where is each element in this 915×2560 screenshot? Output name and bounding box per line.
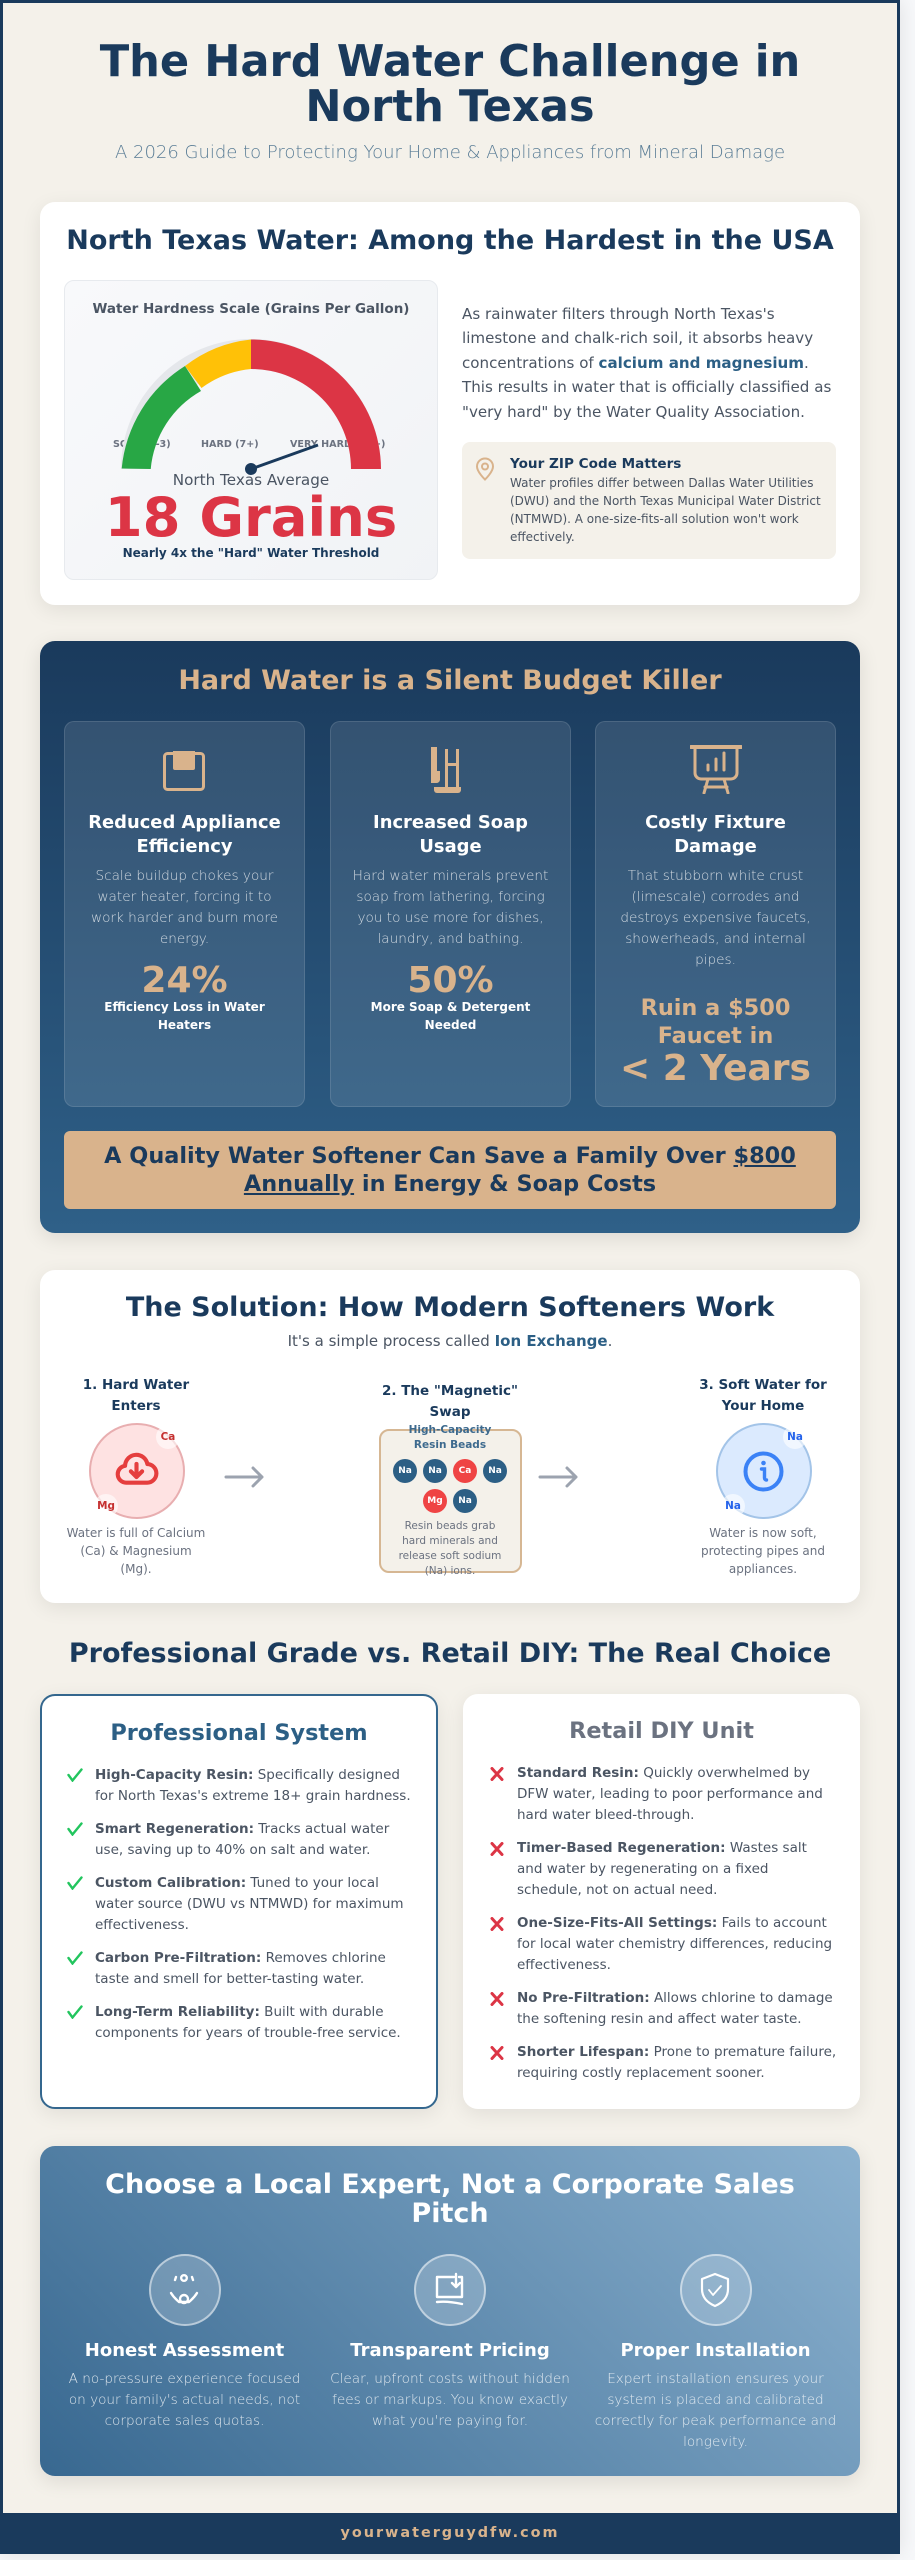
text block: explanation: As rainwater filters through North Texas's <box>462 305 775 323</box>
banner: savings: A Quality Water Softener Can Save a Family Over $800 <box>104 1143 796 1169</box>
card: soap usage: soap from lathering, forcing <box>356 889 545 905</box>
card: appliance efficiency: Efficiency <box>136 836 233 857</box>
gauge note: Nearly 4x the "Hard" Water Threshold <box>123 546 379 560</box>
badge: Mg: Mg <box>97 1500 115 1512</box>
card: soap usage: Hard water minerals prevent <box>353 868 548 884</box>
list: professional benefits: High-Capacity Resin: Specifically designed <box>95 1767 400 1783</box>
step 1 text: (Mg). <box>120 1562 152 1576</box>
list: retail drawbacks <box>490 1765 836 2081</box>
step 3 circle <box>716 1423 812 1519</box>
resin bead heading: Resin Beads <box>414 1439 486 1451</box>
card: soap usage: you to use more for dishes, <box>357 910 544 926</box>
badge: Na top <box>783 1425 807 1449</box>
list: professional benefits: Smart Regeneration: Tracks actual water <box>95 1821 389 1837</box>
banner: savings: Annually in Energy & Soap Costs <box>244 1170 656 1196</box>
heading: solution: The Solution: How Modern Softeners Work <box>126 1292 774 1323</box>
text: proper installation: Proper Installation <box>620 2340 811 2361</box>
list: professional benefits: water source (DWU vs NTMWD) for maximum <box>95 1896 404 1912</box>
card: soap usage: More Soap & Detergent <box>371 1000 530 1014</box>
step 2 box <box>379 1429 522 1573</box>
card: fixture damage: That stubborn white crust <box>628 868 803 884</box>
step 3 title: 3. Soft Water for <box>699 1377 827 1393</box>
list: retail drawbacks: One-Size-Fits-All Settings: Fails to account <box>517 1915 827 1931</box>
icon: proper installation <box>680 2254 752 2326</box>
arrow 2 <box>538 1466 578 1488</box>
step 1 title <box>83 1377 190 1414</box>
badge: Mg <box>94 1494 118 1518</box>
footer <box>0 2513 900 2554</box>
card: soap usage: Needed <box>425 1018 476 1032</box>
list: professional benefits: for North Texas's extreme 18+ grain hardness. <box>95 1788 411 1804</box>
card: fixture damage: < 2 Years <box>620 1048 811 1089</box>
card: fixture damage: pipes. <box>695 952 736 968</box>
step 1 title: Enters <box>111 1398 161 1414</box>
callout text <box>510 476 821 544</box>
list: retail drawbacks: requiring costly replacement sooner. <box>517 2065 765 2081</box>
step 2 text: release soft sodium <box>399 1550 501 1562</box>
resin beads: Na <box>428 1466 442 1476</box>
card: appliance efficiency: water heater, forcing it to <box>97 889 272 905</box>
panel: North Texas water hardness <box>40 202 860 605</box>
badge: Na bottom <box>721 1494 745 1518</box>
step 1 circle <box>88 1423 184 1519</box>
step 2 text: (Na) ions. <box>425 1565 475 1577</box>
gauge labels: SOFT (0-3) <box>113 439 171 450</box>
callout text: Water profiles differ between Dallas Water Utilities <box>510 476 813 490</box>
callout: ZIP code <box>462 442 836 559</box>
icon: info <box>744 1452 784 1492</box>
heading: local expert: Choose a Local Expert, Not a Corporate Sales <box>105 2169 795 2200</box>
gauge caption: North Texas Average <box>173 471 329 489</box>
desc: transparent pricing <box>330 2371 570 2429</box>
card: fixture damage: Costly Fixture <box>645 812 786 833</box>
step 2 title: 2. The "Magnetic" <box>382 1383 518 1399</box>
desc: transparent pricing: fees or markups. You know exactly <box>332 2392 568 2408</box>
step 2 text <box>399 1520 501 1577</box>
arrow 1 <box>224 1466 264 1488</box>
badge: Na top: Na <box>787 1431 803 1443</box>
desc: honest assessment: corporate sales quotas. <box>105 2413 264 2429</box>
card: fixture damage <box>595 721 836 1107</box>
step 3 text: protecting pipes and <box>701 1544 825 1558</box>
card: soap usage: laundry, and bathing. <box>378 931 523 947</box>
desc: transparent pricing: Clear, upfront costs without hidden <box>330 2371 570 2387</box>
panel: retail DIY <box>463 1694 860 2109</box>
list: professional benefits: Custom Calibration: Tuned to your local <box>95 1875 379 1891</box>
list: retail drawbacks: the softening resin and affect water taste. <box>517 2011 802 2027</box>
icon: cloud download <box>116 1452 158 1485</box>
icon: honest assessment <box>148 2254 220 2326</box>
desc: proper installation <box>595 2371 836 2450</box>
subheading: ion exchange: It's a simple process called Ion Exchange. <box>288 1332 612 1350</box>
list: professional benefits: components for years of trouble-free service. <box>95 2025 401 2041</box>
resin beads: Na <box>488 1466 502 1476</box>
panel: local expert <box>40 2146 860 2476</box>
heading: hardest in the USA: North Texas Water: Among the Hardest in the USA <box>66 225 834 256</box>
card: fixture damage: Faucet in <box>658 1023 773 1049</box>
text block: explanation: "very hard" by the Water Quality Association. <box>462 403 805 421</box>
list: retail drawbacks: Timer-Based Regeneration: Wastes salt <box>517 1840 807 1856</box>
step 2 title <box>382 1383 518 1420</box>
resin beads: Na <box>398 1466 412 1476</box>
desc: transparent pricing: what you're paying for. <box>372 2413 528 2429</box>
text: honest assessment: Honest Assessment <box>85 2340 284 2361</box>
step 3 text <box>701 1526 825 1576</box>
callout text: (DWU) and the North Texas Municipal Water District <box>510 494 821 508</box>
heading: local expert <box>105 2169 795 2229</box>
list: retail drawbacks: effectiveness. <box>517 1957 611 1973</box>
list: professional benefits: Long-Term Reliability: Built with durable <box>95 2004 384 2020</box>
heading: budget killer: Hard Water is a Silent Budget Killer <box>178 665 722 696</box>
card: fixture damage: Ruin a $500 <box>641 995 790 1021</box>
heading: retail DIY: Retail DIY Unit <box>569 1718 754 1744</box>
list: retail drawbacks: Shorter Lifespan: Prone to premature failure, <box>517 2044 836 2060</box>
badge: Ca: Ca <box>161 1431 175 1443</box>
card: appliance efficiency: energy. <box>160 931 209 947</box>
gauge title: Water Hardness Scale (Grains Per Gallon) <box>92 301 409 317</box>
chart: hardness gauge <box>121 339 381 475</box>
heading: local expert: Pitch <box>411 2198 489 2229</box>
list: retail drawbacks: hard water bleed-through. <box>517 1807 694 1823</box>
panel: budget killer <box>40 641 860 1233</box>
list: retail drawbacks: DFW water, leading to poor performance and <box>517 1786 823 1802</box>
desc: honest assessment: A no-pressure experience focused <box>69 2371 300 2387</box>
list: professional benefits: Carbon Pre-Filtration: Removes chlorine <box>95 1950 386 1966</box>
list: retail drawbacks: Standard Resin: Quickly overwhelmed by <box>517 1765 810 1781</box>
panel: gauge <box>64 280 438 580</box>
resin beads: Na <box>458 1496 472 1506</box>
desc: honest assessment: on your family's actual needs, not <box>69 2392 300 2408</box>
card: fixture damage: (limescale) corrodes and <box>631 889 800 905</box>
step 2 text: Resin beads grab <box>405 1520 495 1532</box>
resin beads: Mg <box>427 1496 443 1506</box>
card: fixture damage: Damage <box>674 836 757 857</box>
title: The Hard Water Challenge in <box>100 37 800 87</box>
step 2 title: Swap <box>430 1404 470 1420</box>
resin bead heading: High-Capacity <box>409 1424 491 1436</box>
step 2 text: hard minerals and <box>402 1535 498 1547</box>
heading: professional system: Professional System <box>110 1720 368 1746</box>
list: professional benefits: use, saving up to 40% on salt and water. <box>95 1842 370 1858</box>
list: retail drawbacks: No Pre-Filtration: Allows chlorine to damage <box>517 1990 833 2006</box>
resin beads <box>393 1459 507 1513</box>
gauge labels: VERY HARD (10+) <box>290 439 385 450</box>
gauge labels: HARD (7+) <box>201 439 259 450</box>
card: appliance efficiency <box>64 721 305 1107</box>
step 3 title: Your Home <box>722 1398 804 1414</box>
card: soap usage: Usage <box>419 836 482 857</box>
step 1 text: Water is full of Calcium <box>67 1526 205 1540</box>
card: appliance efficiency: Scale buildup chokes your <box>95 868 274 884</box>
card: soap usage <box>330 721 571 1107</box>
banner: savings <box>64 1131 836 1209</box>
icon: map pin <box>476 458 494 481</box>
card: fixture damage: showerheads, and internal <box>625 931 806 947</box>
text block: explanation <box>462 305 831 421</box>
text block: explanation: limestone and chalk-rich soil, it absorbs heavy <box>462 329 813 347</box>
heading: professional vs retail: Professional Grade vs. Retail DIY: The Real Choice <box>69 1638 831 1669</box>
resin bead heading <box>409 1424 492 1451</box>
subtitle: A 2026 Guide to Protecting Your Home & Appliances from Mineral Damage <box>115 142 785 163</box>
step 1 text: (Ca) & Magnesium <box>80 1544 192 1558</box>
step 3 title <box>699 1377 827 1414</box>
text: transparent pricing: Transparent Pricing <box>350 2340 550 2361</box>
title: North Texas <box>305 82 595 132</box>
list: professional benefits <box>67 1767 411 2041</box>
list: retail drawbacks: schedule, not on actual need. <box>517 1882 717 1898</box>
text block: explanation: concentrations of calcium and magnesium. <box>462 354 809 372</box>
text block: explanation: This results in water that is officially classified as <box>462 378 831 396</box>
desc: proper installation: system is placed and calibrated <box>607 2392 824 2408</box>
callout text: effectively. <box>510 530 575 544</box>
list: retail drawbacks: for local water chemistry differences, reducing <box>517 1936 832 1952</box>
desc: proper installation: Expert installation ensures your <box>607 2371 824 2387</box>
badge: Na bottom: Na <box>725 1500 741 1512</box>
card: appliance efficiency: Heaters <box>158 1018 211 1032</box>
card: appliance efficiency: work harder and burn more <box>91 910 278 926</box>
footer: yourwaterguydfw.com <box>340 2525 560 2541</box>
card: appliance efficiency: 24% <box>141 960 228 1001</box>
desc: honest assessment <box>69 2371 300 2429</box>
resin beads: Ca <box>459 1466 471 1476</box>
card: appliance efficiency: Efficiency Loss in Water <box>104 1000 265 1014</box>
panel: professional system <box>40 1694 438 2109</box>
card: appliance efficiency: Reduced Appliance <box>88 812 281 833</box>
step 1 text <box>67 1526 205 1576</box>
icon: soap utensils <box>431 747 461 793</box>
badge: Ca <box>156 1425 180 1449</box>
icon: chart board <box>690 745 742 794</box>
icon: appliance <box>163 751 205 791</box>
callout text: (NTMWD). A one-size-fits-all solution won't work <box>510 512 799 526</box>
title <box>100 37 800 132</box>
gauge labels <box>113 439 385 450</box>
card: fixture damage: destroys expensive faucets, <box>620 910 811 926</box>
card: soap usage: 50% <box>407 960 494 1001</box>
step 3 text: Water is now soft, <box>709 1526 817 1540</box>
card: soap usage: Increased Soap <box>373 812 528 833</box>
step 3 text: appliances. <box>729 1562 797 1576</box>
panel: how softeners work <box>40 1270 860 1603</box>
list: professional benefits: taste and smell for better-tasting water. <box>95 1971 364 1987</box>
big number: 18 grains: 18 Grains <box>105 486 397 549</box>
list: professional benefits: effectiveness. <box>95 1917 189 1933</box>
step 1 title: 1. Hard Water <box>83 1377 189 1393</box>
icon: transparent pricing <box>414 2254 486 2326</box>
callout heading: Your ZIP Code Matters <box>510 456 681 472</box>
desc: proper installation: correctly for peak performance and <box>595 2413 836 2429</box>
desc: proper installation: longevity. <box>683 2434 748 2450</box>
list: retail drawbacks: and water by regenerating on a fixed <box>517 1861 768 1877</box>
